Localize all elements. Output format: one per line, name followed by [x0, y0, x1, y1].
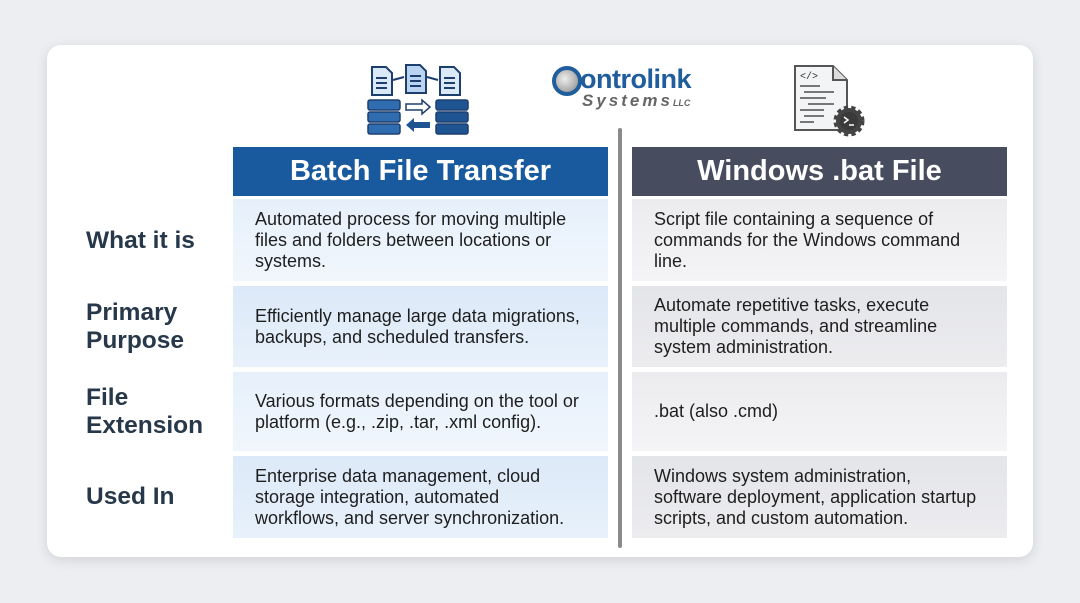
- header: windows bat file: [632, 147, 1007, 196]
- cell left 4: [233, 456, 608, 538]
- cell left 1: [233, 199, 608, 281]
- label: file extension: Extension: [86, 412, 203, 439]
- logo: SystemsLLC: [582, 91, 690, 110]
- cell right 1: Script file containing a sequence of commands for the Windows command line.: [654, 208, 960, 270]
- divider: [618, 128, 622, 548]
- label: file extension: File: [86, 384, 128, 411]
- cell left 2: Efficiently manage large data migrations, backups, and scheduled transfers.: [255, 306, 580, 346]
- cell left 4: Enterprise data management, cloud storage integration, automated workflows, and server synchronization.: [255, 466, 564, 528]
- header: batch file transfer: [233, 147, 608, 196]
- cell left 2: [233, 286, 608, 367]
- label: what it is: What it is: [86, 227, 195, 254]
- icon: batch transfer: [367, 64, 469, 135]
- logo: ontrolink: [580, 64, 691, 94]
- label: primary purpose: Purpose: [86, 327, 184, 354]
- icon: bat script file: [794, 65, 864, 136]
- label: file extension: [86, 384, 203, 439]
- header: batch file transfer: Batch File Transfer: [290, 155, 551, 187]
- cell right 4: Windows system administration, software deployment, application startup scripts, and custom automation.: [654, 466, 976, 528]
- logo: [552, 64, 692, 110]
- label: primary purpose: Primary: [86, 299, 177, 326]
- icon: bat script file: </>: [800, 71, 818, 83]
- label: used in: Used In: [86, 483, 174, 510]
- cell right 4: [632, 456, 1007, 538]
- card: [47, 45, 1033, 557]
- cell right 1: [632, 199, 1007, 281]
- cell right 3: .bat (also .cmd): [654, 401, 778, 421]
- cell left 1: Automated process for moving multiple files and folders between locations or systems.: [255, 208, 566, 270]
- cell left 3: [233, 372, 608, 451]
- header: windows bat file: Windows .bat File: [697, 155, 942, 187]
- cell right 3: [632, 372, 1007, 451]
- cell right 2: [632, 286, 1007, 367]
- cell left 3: Various formats depending on the tool or platform (e.g., .zip, .tar, .xml config).: [255, 390, 579, 432]
- cell right 2: Automate repetitive tasks, execute multiple commands, and streamline system administration.: [654, 295, 937, 357]
- label: primary purpose: [86, 299, 184, 354]
